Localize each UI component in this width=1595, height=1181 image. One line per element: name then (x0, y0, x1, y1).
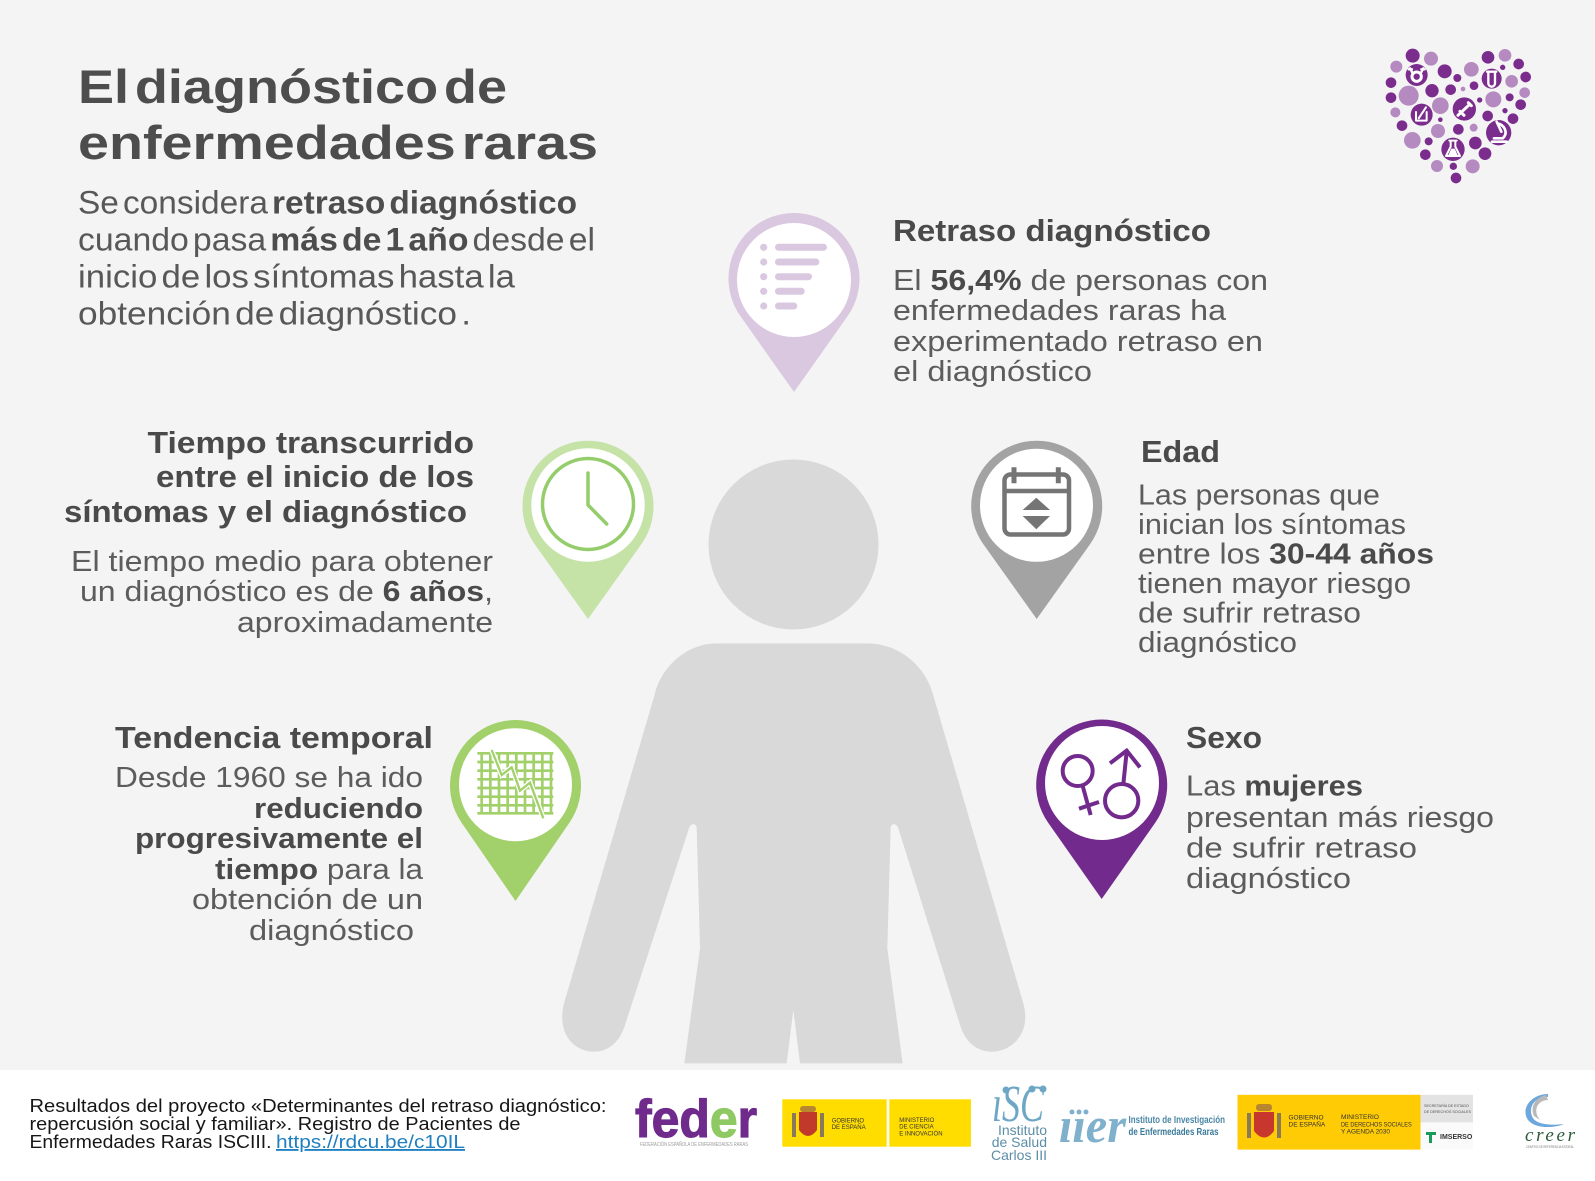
text: edad: Edad (1141, 435, 1220, 469)
text: retraso diagnóstico: enfermedades raras ha (893, 295, 1226, 327)
logo: iier: ııer (1059, 1097, 1127, 1153)
intro text (78, 184, 595, 332)
text: sexo: presentan más riesgo (1186, 802, 1494, 834)
text: retraso diagnóstico (893, 214, 1268, 388)
logo: instituto de salud carlos iii: Carlos III (991, 1147, 1047, 1163)
text: retraso diagnóstico: experimentado retraso en (893, 326, 1263, 358)
text: sexo: Las mujeres (1186, 770, 1363, 802)
icon: clock (542, 458, 634, 550)
icon: line chart grid (477, 750, 553, 818)
text: tendencia temporal: obtención de un (192, 884, 423, 916)
logo: gobierno ministerio de ciencia: DE CIENCIA (899, 1124, 934, 1130)
icon: gender symbols (1063, 751, 1140, 817)
text: tendencia temporal: diagnóstico (249, 915, 414, 947)
logo: gobierno ministerio de ciencia: MINISTERIO (899, 1118, 935, 1124)
logo: gobierno ministerio de derechos sociales: DE DERECHOS SOCIALES (1341, 1122, 1412, 1129)
intro text: inicio de los síntomas hasta la (78, 258, 515, 294)
text: tiempo transcurrido: aproximadamente (237, 607, 493, 639)
logo: gobierno ministerio de derechos sociales: MINISTERIO (1341, 1114, 1379, 1121)
text: edad: Las personas que (1138, 480, 1380, 512)
logo: gobierno ministerio de ciencia: GOBIERNO (832, 1119, 864, 1125)
logo: iier: de Enfermedades Raras (1128, 1127, 1219, 1138)
text: edad: de sufrir retraso (1138, 598, 1361, 630)
logo: instituto de salud carlos iii: de Salud (992, 1134, 1047, 1150)
logo: gobierno ministerio de ciencia: DE ESPAÑA (832, 1124, 866, 1131)
logo: gobierno ministerio de ciencia: E INNOVACIÓN (899, 1130, 943, 1137)
source text: repercusión social y familiar». Registro de Pacientes de (30, 1113, 520, 1134)
text: tiempo transcurrido: un diagnóstico es de 6 años , (80, 576, 493, 608)
logo: instituto de salud carlos iii (991, 1076, 1047, 1163)
intro text: cuando pasa más de 1 año desde el (78, 222, 595, 258)
text: tiempo transcurrido: síntomas y el diagnóstico (64, 495, 467, 529)
logo: creer: creer (1525, 1125, 1576, 1146)
text: tiempo transcurrido (64, 426, 494, 639)
logo: iier (1059, 1097, 1225, 1153)
logo: gobierno ministerio de ciencia (782, 1099, 971, 1147)
intro text: obtención de diagnóstico . (78, 296, 471, 332)
text: tendencia temporal: Tendencia temporal (115, 721, 433, 755)
logo: gobierno ministerio de derechos sociales: SECRETARÍA DE ESTADO (1424, 1104, 1469, 1108)
source text: Resultados del proyecto «Determinantes del retraso diagnóstico: (30, 1095, 606, 1116)
text: retraso diagnóstico: Retraso diagnóstico (893, 214, 1211, 248)
logo: feder: feder (635, 1090, 757, 1149)
text: edad: tienen mayor riesgo (1138, 568, 1411, 600)
text: tendencia temporal (115, 721, 433, 947)
logo: gobierno ministerio de derechos sociales (1238, 1095, 1473, 1150)
logo: instituto de salud carlos iii: Instituto (998, 1122, 1047, 1138)
logo: instituto de salud carlos iii: ıSC (992, 1076, 1045, 1133)
footer panel (0, 1070, 1595, 1181)
text: edad: inician los síntomas (1138, 509, 1406, 541)
text: tendencia temporal: progresivamente el (135, 823, 423, 855)
person silhouette (562, 460, 1025, 1063)
text: tiempo transcurrido: El tiempo medio para obtener (71, 546, 494, 578)
logo: gobierno ministerio de derechos sociales: IMSERSO (1440, 1134, 1473, 1141)
intro text: Se considera retraso diagnóstico (78, 184, 577, 220)
text: edad (1138, 435, 1434, 659)
text: retraso diagnóstico: El 56,4% de personas con (893, 265, 1268, 297)
title: El diagnóstico de (78, 60, 507, 113)
logo: creer (1525, 1094, 1576, 1149)
title (78, 60, 598, 169)
logo: creer: CENTRO DE REFERENCIA ESTATAL (1526, 1145, 1574, 1149)
text: sexo: Sexo (1186, 721, 1262, 755)
text: edad: entre los 30-44 años (1138, 538, 1434, 570)
text: tendencia temporal: Desde 1960 se ha ido (115, 762, 423, 794)
logo: gobierno ministerio de derechos sociales: Y AGENDA 2030 (1341, 1129, 1390, 1136)
text: sexo: diagnóstico (1186, 863, 1351, 895)
icon: list (760, 244, 827, 310)
pin: retraso diagnóstico (728, 213, 860, 392)
text: tendencia temporal: tiempo para la (215, 854, 423, 886)
title: enfermedades raras (78, 116, 598, 169)
text: tiempo transcurrido: entre el inicio de los (156, 460, 474, 494)
logo: gobierno ministerio de derechos sociales: DE ESPAÑA (1288, 1120, 1326, 1129)
source text: Enfermedades Raras ISCIII. (30, 1131, 272, 1152)
text: retraso diagnóstico: el diagnóstico (893, 356, 1092, 388)
icon: heart logo (1386, 49, 1531, 183)
text: sexo (1186, 721, 1494, 895)
logo: iier: Instituto de Investigación (1128, 1115, 1225, 1126)
pin: edad (971, 441, 1102, 619)
text: edad: diagnóstico (1138, 627, 1297, 659)
logo: gobierno ministerio de derechos sociales: DE DERECHOS SOCIALES (1424, 1110, 1471, 1114)
icon: calendar (1004, 467, 1070, 534)
pin: tiempo transcurrido (522, 441, 653, 619)
text: tendencia temporal: reduciendo (254, 793, 423, 825)
text: sexo: de sufrir retraso (1186, 832, 1417, 864)
logo: gobierno ministerio de derechos sociales: GOBIERNO (1288, 1115, 1324, 1122)
source text (30, 1095, 606, 1152)
pin: sexo (1036, 719, 1167, 899)
source text: https://rdcu.be/c10IL (276, 1131, 465, 1152)
text: tiempo transcurrido: Tiempo transcurrido (148, 426, 474, 460)
logo: feder: FEDERACIÓN ESPAÑOLA DE ENFERMEDADES RARAS (640, 1141, 749, 1148)
pin: tendencia temporal (450, 720, 581, 901)
